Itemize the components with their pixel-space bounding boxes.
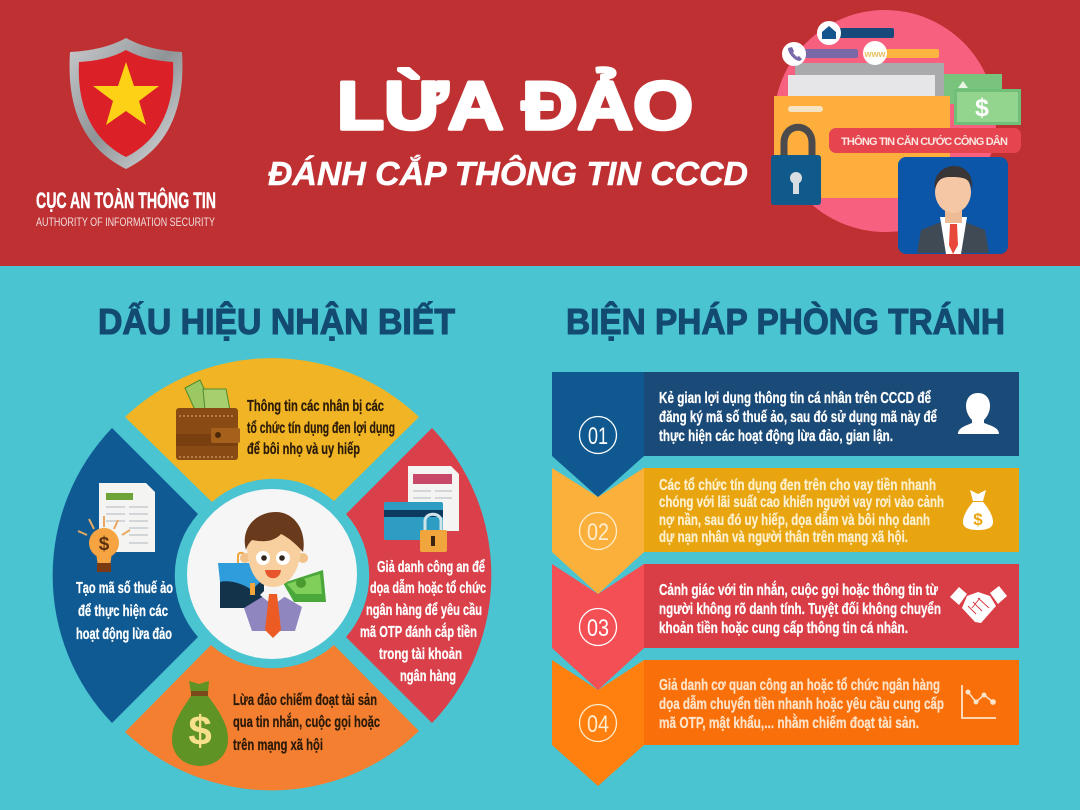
segment: police impersonation xyxy=(346,428,491,723)
text: Giả danh công an để xyxy=(377,558,485,576)
text: dọa dẫm hoặc tổ chức xyxy=(370,578,486,597)
text: để bôi nhọ và uy hiếp xyxy=(247,440,360,458)
logo: shield with star xyxy=(70,38,182,169)
text: để thực hiện các xyxy=(78,602,168,620)
text: Tạo mã số thuế ảo xyxy=(76,580,173,597)
icon: handshake xyxy=(950,586,1007,623)
icon: money bills xyxy=(943,74,1021,125)
body and tie xyxy=(244,587,302,638)
cash xyxy=(283,570,326,602)
step 02: dự nạn nhân và người thân trên mạng xã hội. xyxy=(659,529,908,546)
papers in folder xyxy=(788,63,944,97)
heading: warning signs: DẤU HIỆU NHẬN BIẾT xyxy=(98,300,455,342)
icon: line chart xyxy=(962,685,996,718)
step 01: Kẻ gian lợi dụng thông tin cá nhân trên CCCD để xyxy=(659,389,931,407)
icon: money bag xyxy=(963,490,993,530)
briefcase xyxy=(218,553,264,608)
icon: money bills: $ xyxy=(975,94,989,122)
step 01: đăng ký mã số thuế ảo, sau đó sử dụng mã này để xyxy=(659,408,937,426)
header band xyxy=(0,0,1080,266)
text: hoạt động lừa đảo xyxy=(76,626,172,643)
step 04: dọa dẫm chuyển tiền nhanh hoặc yêu cầu cung cấp xyxy=(659,694,944,713)
step 01 xyxy=(552,372,1019,497)
step 04 xyxy=(552,660,1019,786)
text: qua tin nhắn, cuộc gọi hoặc xyxy=(233,712,380,731)
icon: money bag: $ xyxy=(188,707,212,754)
step 03 xyxy=(552,564,1019,690)
step 02: 02 xyxy=(587,519,609,546)
center: person with briefcase and cash xyxy=(187,489,357,659)
step 04: Giả danh cơ quan công an hoặc tổ chức ngân hàng xyxy=(659,676,940,694)
subtitle: ĐÁNH CẮP THÔNG TIN CCCD xyxy=(268,154,748,192)
text: mã OTP đánh cắp tiền xyxy=(360,622,477,641)
contact bars: www xyxy=(863,49,886,59)
illustration: identity data folder xyxy=(771,10,1021,254)
folder xyxy=(774,96,950,198)
segment: credit blackmail xyxy=(125,358,419,502)
title: LỪA ĐẢO xyxy=(337,67,693,144)
segment: fake tax code xyxy=(53,428,198,723)
segment: asset fraud xyxy=(125,645,419,790)
text: Thông tin các nhân bị các xyxy=(247,398,384,415)
step 03: Cảnh giác với tin nhắn, cuộc gọi hoặc thông tin từ xyxy=(659,580,938,599)
logo text: English name: AUTHORITY OF INFORMATION SECURITY xyxy=(36,215,215,229)
step 03: người không rõ danh tính. Tuyệt đối không chuyển xyxy=(659,600,941,618)
text: ngân hàng xyxy=(400,668,456,685)
icon: money bag: $ xyxy=(973,510,983,529)
step 01: thực hiện các hoạt động lừa đảo, gian lận. xyxy=(659,428,893,445)
icon: wallet xyxy=(176,380,240,460)
contact bars xyxy=(782,21,939,66)
icon: padlock xyxy=(771,127,821,205)
label pill: THÔNG TIN CĂN CƯỚC CÔNG DÂN xyxy=(841,135,1008,148)
icon: document, card and lock xyxy=(384,466,459,552)
text: ngân hàng để yêu cầu xyxy=(366,601,482,619)
icon: user xyxy=(958,393,999,434)
text: Lừa đảo chiếm đoạt tài sản xyxy=(233,692,377,709)
icon: document and light bulb: $ xyxy=(99,534,110,555)
step 04: 04 xyxy=(587,711,609,738)
step 03: khoản tiền hoặc cung cấp thông tin cá nhân. xyxy=(659,620,908,637)
text xyxy=(233,692,380,754)
step 02: nợ nần, sau đó uy hiếp, dọa dẫm và bôi nhọ danh xyxy=(659,510,930,529)
step 04: mã OTP, mật khẩu,... nhằm chiếm đoạt tài sản. xyxy=(659,713,919,732)
heading: prevention: BIỆN PHÁP PHÒNG TRÁNH xyxy=(566,300,1005,342)
text xyxy=(247,398,395,458)
icon: document and light bulb xyxy=(78,483,155,572)
text xyxy=(76,580,173,643)
text: tổ chức tín dụng đen lợi dụng xyxy=(247,419,395,437)
panel: prevention steps xyxy=(552,372,1019,786)
logo text: agency name: CỤC AN TOÀN THÔNG TIN xyxy=(36,188,216,213)
panel: circular diagram xyxy=(53,358,491,790)
head xyxy=(240,512,308,587)
text: trên mạng xã hội xyxy=(233,737,323,754)
text xyxy=(360,558,486,685)
step 02 xyxy=(552,468,1019,594)
text: trong tài khoản xyxy=(379,646,462,663)
step 02: chóng với lãi suất cao khiến người vay rơi vào cảnh xyxy=(659,494,944,511)
label pill xyxy=(829,128,1021,153)
step 03: 03 xyxy=(587,615,609,642)
step 01: 01 xyxy=(588,423,608,450)
ID card portrait xyxy=(898,157,1008,254)
step 02: Các tổ chức tín dụng đen trên cho vay tiền nhanh xyxy=(659,476,936,494)
icon: money bag xyxy=(172,681,228,766)
